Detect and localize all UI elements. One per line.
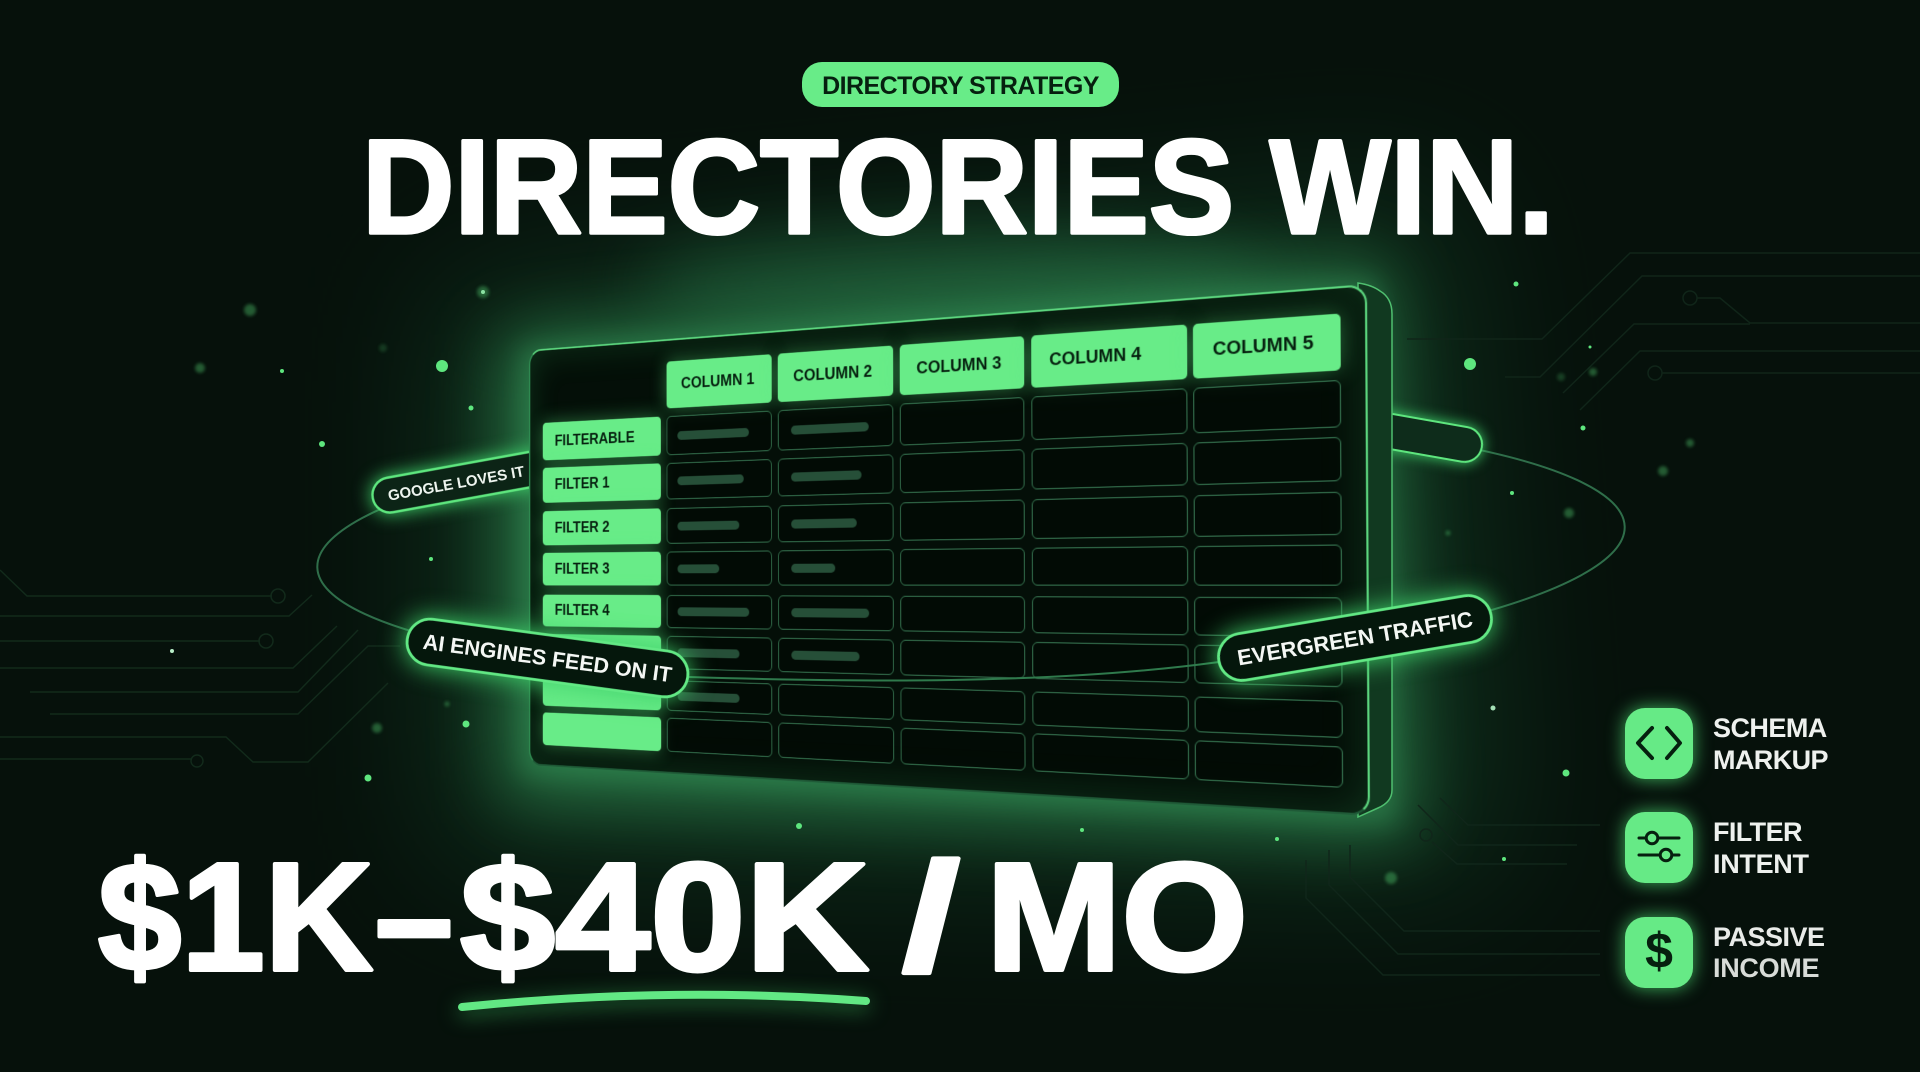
item: filter intent: FILTER [1713,817,1802,847]
item: filter intent [1625,812,1810,883]
revenue headline: / [902,831,960,1003]
pill: google loves it [370,449,553,515]
revenue headline: $1K [98,831,373,1003]
pill: google loves it: GOOGLE LOVES IT [387,463,526,505]
item: passive income: PASSIVE [1713,922,1825,952]
filter labels: FILTERABLE [555,428,635,449]
filter labels: FILTER 1 [555,474,610,493]
badge: directory strategy [802,62,1119,107]
filter labels: FILTER 4 [555,601,610,620]
right pill stub behind panel [1299,399,1485,465]
pill: AI engines feed on it: AI ENGINES FEED ON IT [422,630,673,687]
pill: AI engines feed on it [404,616,691,700]
filter labels: FILTER 2 [555,518,610,536]
column headers: COLUMN 1 [681,370,754,393]
item: passive income [1625,917,1825,988]
pill: evergreen traffic [1215,592,1495,684]
orbit line crossing the panel [689,662,1219,681]
item: passive income: $ [1645,923,1673,979]
revenue headline: MO [986,831,1248,1003]
item: passive income: INCOME [1713,953,1819,983]
title: DIRECTORIES WIN. [362,113,1554,262]
filter labels: FILTER 3 [555,559,610,577]
pill: evergreen traffic: EVERGREEN TRAFFIC [1235,606,1475,670]
revenue headline: $40K [460,831,869,1003]
circuit lines lower right [1306,798,1600,975]
floating particles [170,282,1694,884]
column headers: COLUMN 2 [793,362,872,386]
panel glow [440,190,1500,880]
panel side extrusion [1358,283,1392,817]
underline accent [462,995,866,1007]
column headers: COLUMN 3 [916,353,1001,378]
column headers: COLUMN 4 [1049,344,1141,370]
column headers [656,301,1355,417]
item: schema markup: SCHEMA [1713,713,1827,743]
data cell grid [666,380,1344,788]
column headers: COLUMN 5 [1213,332,1314,360]
filter labels [534,406,669,762]
item: filter intent: INTENT [1713,849,1810,879]
item: schema markup: MARKUP [1713,745,1828,775]
circuit lines upper right [1407,253,1920,410]
directory table panel [529,284,1370,816]
orbit ring [313,397,1629,697]
badge: directory strategy: DIRECTORY STRATEGY [822,72,1100,100]
revenue headline: – [375,831,453,1003]
circuit lines left [0,570,400,767]
item: schema markup [1625,708,1828,779]
